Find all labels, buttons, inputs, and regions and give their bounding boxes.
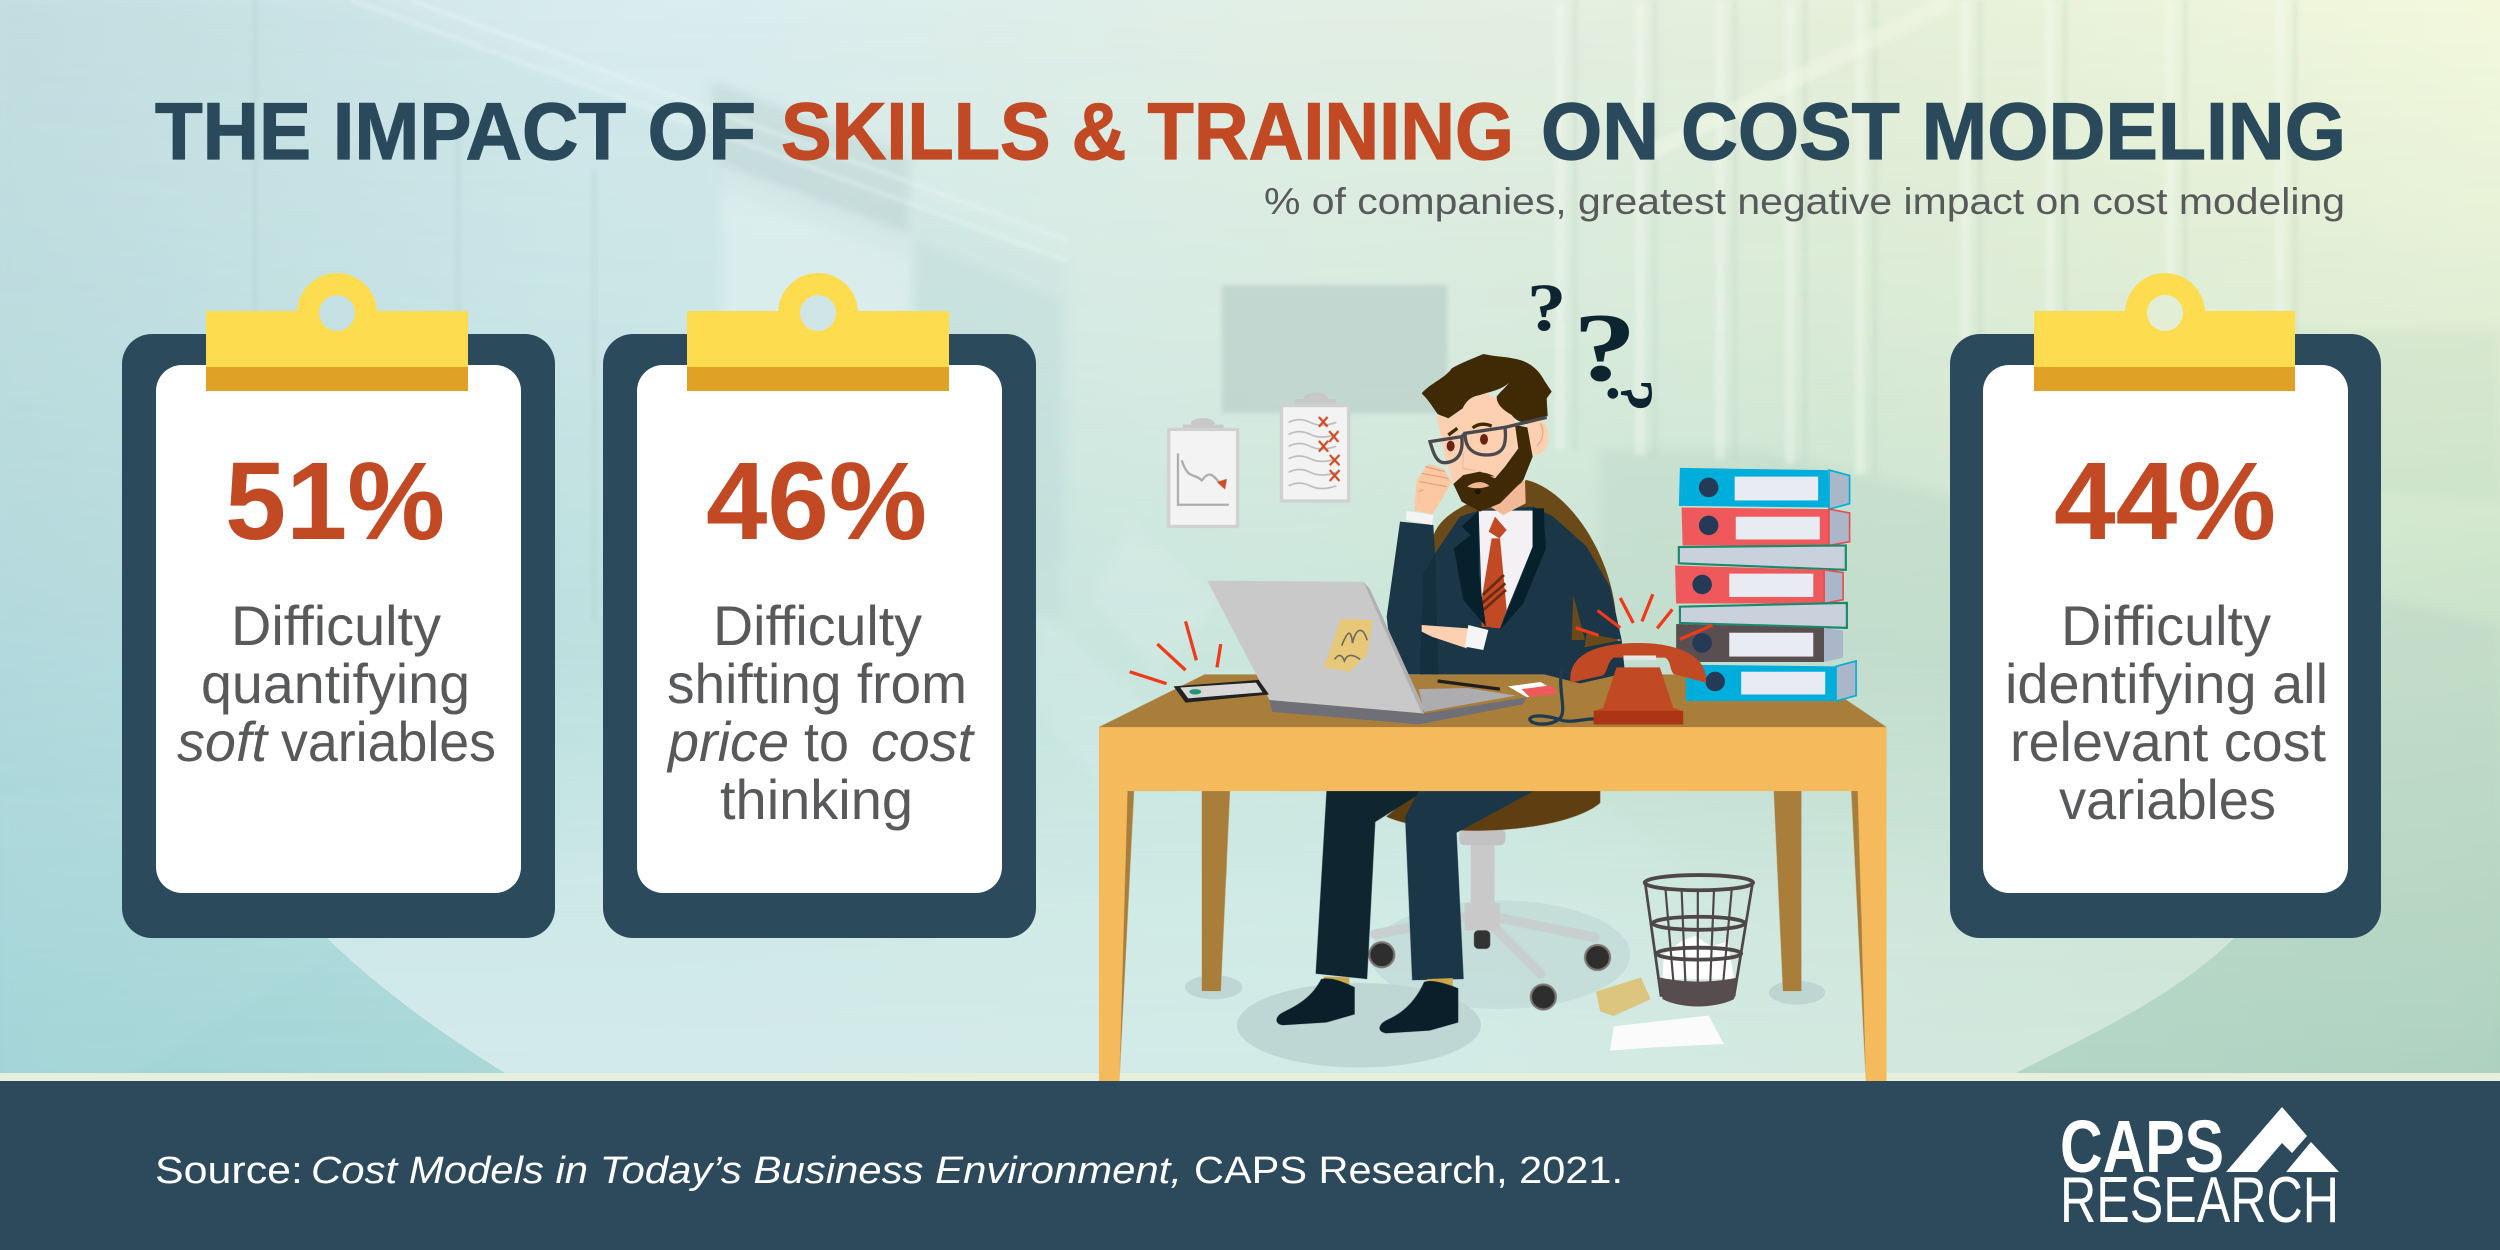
icon: clip — [2034, 273, 2295, 391]
desk — [1099, 674, 1886, 1081]
ear — [1525, 418, 1548, 455]
smartphone — [1174, 680, 1269, 703]
wall chart clipboard — [1169, 418, 1238, 526]
text: description: variables — [281, 710, 496, 773]
pencil and notes — [1438, 681, 1558, 697]
source text — [155, 1150, 1623, 1192]
man: upper body and head — [1387, 354, 1625, 683]
source text: Source: — [155, 1150, 303, 1192]
trousers — [1316, 791, 1534, 988]
sill strip under background — [0, 1073, 2500, 1081]
text: description — [177, 594, 496, 773]
chair seat — [1386, 791, 1600, 831]
mouth — [1460, 472, 1495, 494]
text: description: relevant cost — [2010, 710, 2326, 773]
text: description: quantifying — [201, 652, 470, 715]
jacket — [1387, 507, 1625, 683]
crossed arm hand and cuff — [1422, 625, 1488, 650]
text: description — [2005, 594, 2328, 831]
logo: CAPS Research: RESEARCH — [2060, 1163, 2339, 1236]
chair back — [1430, 480, 1621, 674]
illustration: stressed man at desk — [1099, 269, 1886, 1081]
icon: clip — [687, 273, 949, 391]
stat: 51%: 51% — [225, 440, 445, 563]
text: description: Difficulty — [713, 594, 922, 657]
dropped sticky note — [1596, 977, 1651, 1016]
text: description: price — [666, 710, 789, 773]
hair — [1422, 354, 1552, 424]
text: description: Difficulty — [231, 594, 441, 657]
question marks — [1527, 269, 1666, 412]
logo: CAPS Research — [2060, 1105, 2339, 1236]
beard — [1453, 425, 1533, 512]
desk items — [1130, 468, 1856, 1051]
title: SKILLS & TRAINING — [781, 87, 1514, 177]
waste paper basket — [1645, 875, 1753, 1007]
laptop — [1207, 581, 1527, 724]
logo: CAPS Research: CAPS — [2060, 1105, 2224, 1188]
neck — [1490, 480, 1526, 515]
stat: 44%: 44% — [2054, 440, 2276, 563]
wall checklist clipboard — [1281, 393, 1349, 501]
text: description: to — [804, 710, 849, 773]
text: description: Difficulty — [2061, 594, 2271, 657]
text: description: thinking — [720, 768, 913, 831]
question marks: ? — [1527, 269, 1566, 345]
face — [1437, 393, 1522, 495]
text: description — [666, 594, 975, 831]
text: description: variables — [2059, 768, 2276, 831]
question marks: ? — [1593, 379, 1666, 412]
ringing lines — [1130, 594, 1712, 684]
icon: clip — [206, 273, 468, 391]
title — [155, 87, 2346, 177]
question marks: ? — [1573, 294, 1637, 402]
desk back legs — [1202, 791, 1801, 991]
subtitle: % of companies, greatest negative impact on cost modeling — [1264, 181, 2345, 222]
raised hand — [1406, 464, 1452, 525]
source text: CAPS Research, 2021. — [1194, 1150, 1623, 1192]
telephone — [1530, 643, 1706, 724]
panel: 46% clipboard — [603, 273, 1036, 938]
text: description: identifying all — [2005, 652, 2328, 715]
shoes — [1276, 978, 1458, 1033]
footer band — [0, 1081, 2500, 1250]
glasses and eyes — [1430, 417, 1547, 471]
floor shadows — [1185, 901, 1825, 1067]
stat: 46%: 46% — [706, 440, 927, 563]
dropped paper — [1610, 1015, 1724, 1051]
source text: Cost Models in Today’s Business Environment, — [311, 1150, 1182, 1192]
text: description: shifting from — [667, 652, 967, 715]
title: ON COST MODELING — [1541, 87, 2346, 177]
text: description: soft — [177, 710, 269, 773]
panel: 44% clipboard — [1950, 273, 2381, 938]
panel: 51% clipboard — [122, 273, 555, 938]
title: THE IMPACT OF — [155, 87, 756, 177]
text: description: cost — [871, 710, 975, 773]
chair base — [1369, 829, 1610, 1009]
binders stack — [1675, 468, 1856, 701]
